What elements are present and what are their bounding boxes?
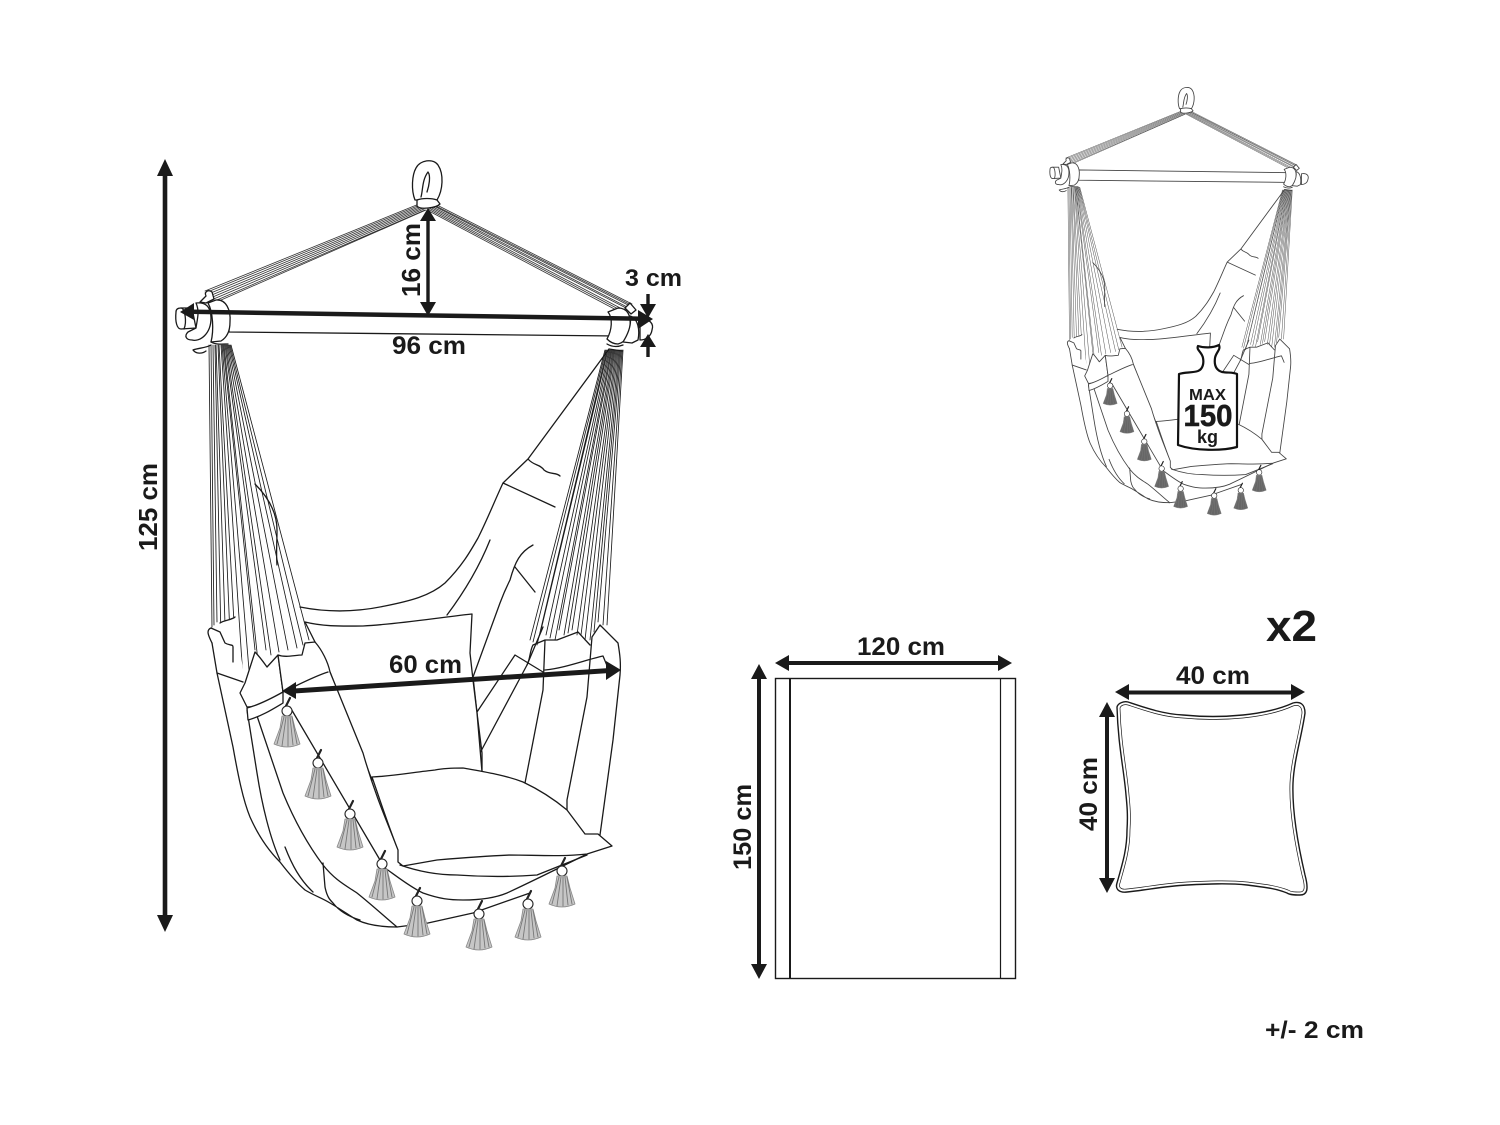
dimension: rope drop 16 cm — [396, 208, 436, 316]
dimension: pillow height 40 cm: 40 cm — [1075, 757, 1103, 831]
dimension: pillow width 40 cm: 40 cm — [1176, 662, 1250, 690]
icon: weight 150 kg max: kg — [1197, 427, 1218, 447]
icon: weight 150 kg max — [1178, 345, 1237, 450]
dimension: blanket width 120 cm: 120 cm — [857, 633, 945, 661]
dimension: height 125 cm — [133, 159, 173, 932]
dimension: rope drop 16 cm: 16 cm — [396, 223, 426, 297]
dimension: pillow height 40 cm — [1075, 702, 1115, 893]
pillow outline — [1116, 702, 1307, 895]
dimension: pillow width 40 cm — [1115, 662, 1305, 700]
dimension: seat width 60 cm: 60 cm — [389, 651, 462, 679]
dimension: seat width 60 cm — [282, 651, 621, 699]
icon: weight 150 kg max: MAX — [1189, 387, 1226, 404]
dimension: bar width 96 cm: 96 cm — [392, 332, 466, 360]
pillow multiplier x2: x2 — [1266, 602, 1317, 651]
dimension: height 125 cm: 125 cm — [133, 463, 163, 551]
main hanging chair illustration — [176, 161, 652, 950]
dimension: bar diameter 3 cm: 3 cm — [625, 265, 682, 292]
icon: weight 150 kg max: 150 — [1184, 398, 1232, 433]
dimension: bar diameter 3 cm — [625, 265, 682, 357]
dimension: blanket height 150 cm: 150 cm — [729, 784, 757, 870]
tolerance note: +/- 2 cm — [1265, 1017, 1364, 1044]
blanket outline — [776, 678, 1016, 978]
dimension: blanket width 120 cm — [775, 633, 1012, 671]
small chair with load limit — [1050, 87, 1308, 515]
dimension: bar width 96 cm — [180, 303, 653, 360]
dimension: blanket height 150 cm — [729, 664, 767, 979]
